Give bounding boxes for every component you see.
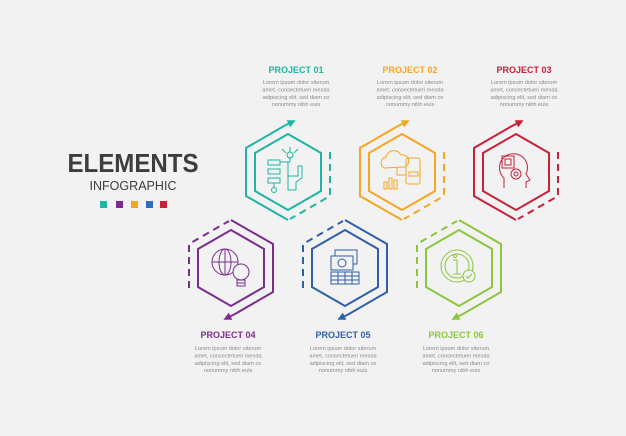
icon: money and calculator — [331, 250, 359, 284]
text: project 04: adipiscing elit, sed diam co — [195, 361, 261, 367]
text: project 03: PROJECT 03 — [496, 65, 552, 75]
title: ELEMENTS — [68, 148, 198, 178]
text: project 01: Lorem ipsum dolor siterum — [263, 80, 329, 86]
text: project 03: adipiscing elit, sed diam co — [491, 95, 557, 101]
text: project 03: amet, consectetueri mesda — [490, 88, 558, 94]
hexagon: project 02 — [360, 122, 444, 220]
text: project 01: adipiscing elit, sed diam co — [263, 95, 329, 101]
text: project 04: nonummy nibh euis — [204, 368, 252, 374]
title: INFOGRAPHIC — [90, 178, 176, 193]
text: project 06 — [422, 330, 490, 374]
title — [68, 148, 198, 193]
text: project 01: amet, consectetueri mesda — [262, 88, 330, 94]
text: project 05: amet, consectetueri mesda — [309, 354, 377, 360]
text: project 06: adipiscing elit, sed diam co — [423, 361, 489, 367]
icon: globe and bulb — [212, 249, 249, 286]
text: project 06: PROJECT 06 — [428, 330, 484, 340]
text: project 04: Lorem ipsum dolor siterum — [195, 346, 261, 352]
text: project 06: Lorem ipsum dolor siterum — [423, 346, 489, 352]
hexagon: project 06 — [417, 220, 501, 318]
text: project 03 — [490, 65, 558, 108]
text: project 05: adipiscing elit, sed diam co — [310, 361, 376, 367]
icon: robot hand flowchart — [268, 147, 302, 192]
text: project 02 — [376, 65, 444, 108]
text: project 03: Lorem ipsum dolor siterum — [491, 80, 557, 86]
text: project 01 — [262, 65, 330, 108]
text: project 02: nonummy nibh euis — [386, 102, 434, 108]
text: project 01: nonummy nibh euis — [272, 102, 320, 108]
text: project 04: PROJECT 04 — [200, 330, 256, 340]
text: project 05 — [309, 330, 377, 374]
text: project 02: Lorem ipsum dolor siterum — [377, 80, 443, 86]
text: project 04 — [194, 330, 262, 374]
text: project 04: amet, consectetueri mesda — [194, 354, 262, 360]
hexagon: project 04 — [189, 220, 273, 318]
icon: head with chip — [499, 154, 530, 188]
text: project 05: Lorem ipsum dolor siterum — [310, 346, 376, 352]
icon: cloud and phone — [381, 151, 420, 189]
text: project 06: nonummy nibh euis — [432, 368, 480, 374]
hexagon: project 01 — [246, 122, 330, 220]
text: project 02: amet, consectetueri mesda — [376, 88, 444, 94]
text: project 02: adipiscing elit, sed diam co — [377, 95, 443, 101]
text: project 05: nonummy nibh euis — [319, 368, 367, 374]
hexagon: project 03 — [474, 122, 558, 220]
icon: info check — [441, 250, 475, 282]
text: project 06: amet, consectetueri mesda — [422, 354, 490, 360]
color squares — [100, 201, 167, 208]
hexagon: project 05 — [303, 220, 387, 318]
text: project 05: PROJECT 05 — [315, 330, 371, 340]
text: project 02: PROJECT 02 — [382, 65, 438, 75]
text: project 01: PROJECT 01 — [268, 65, 324, 75]
text: project 03: nonummy nibh euis — [500, 102, 548, 108]
